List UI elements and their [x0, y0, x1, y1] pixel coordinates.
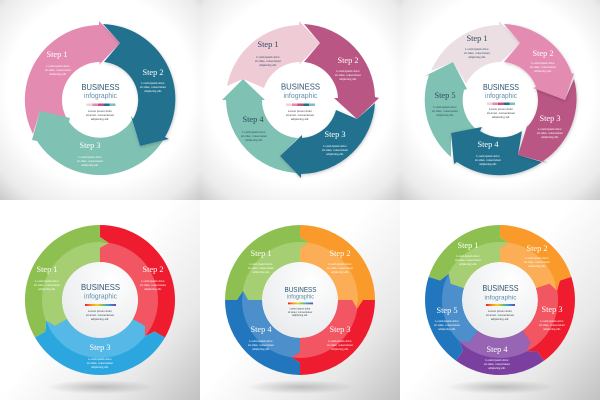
text: Step 1 body: adipiscing elit.	[252, 270, 270, 274]
center text: adipiscing elit.	[91, 317, 109, 321]
text: Step 3 body: sit amet, consectetuer	[322, 148, 348, 153]
heading: Step 2: Step 2	[143, 68, 163, 77]
heading: Step 4: Step 4	[243, 115, 264, 124]
color bar	[486, 304, 515, 306]
text: Step 1 body: sit amet, consectetuer	[255, 59, 281, 64]
text: Step 3 body: Lorem ipsum dolor	[323, 144, 347, 148]
segment: Step 1	[431, 21, 520, 84]
text: Step 2 body: Lorem ipsum dolor	[328, 262, 352, 266]
text: Step 1 body: sit amet, consectetuer	[45, 68, 71, 73]
ground shadow	[245, 380, 355, 394]
text: Step 4 body: Lorem ipsum dolor	[476, 154, 500, 158]
background	[200, 200, 400, 400]
heading: Step 5: Step 5	[435, 91, 455, 100]
heading: Step 3: Step 3	[90, 343, 110, 352]
segment: Step 2	[300, 225, 375, 309]
segment: Step 3	[518, 79, 577, 163]
text: Step 4 body: Lorem ipsum dolor	[242, 130, 266, 134]
segment: Step 1	[227, 21, 320, 88]
background	[200, 0, 400, 200]
text: Step 2 body: Lorem ipsum dolor	[141, 81, 165, 85]
segment: Step 4	[225, 291, 300, 375]
text: Step 5 body: sit amet, consectetuer	[432, 109, 458, 114]
segment: Step 1	[225, 225, 309, 300]
text: Step 1 body: Lorem ipsum dolor	[35, 279, 59, 283]
center subtitle: infographic	[287, 294, 314, 300]
heading: Step 2: Step 2	[338, 56, 358, 65]
text: Step 3 body: Lorem ipsum dolor	[88, 357, 112, 361]
center circle	[462, 262, 538, 338]
heading: Step 3: Step 3	[80, 141, 100, 150]
text: Step 2 body: adipiscing elit.	[331, 270, 349, 274]
center text: sit amet, consectetuer	[487, 111, 515, 115]
center title: BUSINESS	[82, 83, 120, 92]
text: Step 3 body: Lorem ipsum dolor	[328, 339, 352, 343]
center subtitle: infographic	[284, 91, 318, 100]
panel: five-step vivid cycle	[400, 200, 600, 400]
text: Step 2 body: Lorem ipsum dolor	[525, 256, 549, 260]
text: Step 2 body: adipiscing elit.	[339, 77, 357, 81]
center subtitle: infographic	[485, 91, 517, 100]
panel: four-step pastel cycle	[200, 0, 400, 200]
segment: Step 1	[429, 225, 509, 288]
center circle	[62, 62, 138, 138]
color bar	[86, 104, 116, 106]
segment: Step 3	[500, 268, 600, 366]
heading: Step 1: Step 1	[258, 40, 278, 49]
center circle	[262, 262, 338, 338]
text: Step 4 body: sit amet, consectetuer	[484, 362, 510, 367]
segment: Step 2	[504, 24, 574, 100]
text: Step 2 body: adipiscing elit.	[144, 89, 162, 93]
color bar	[85, 304, 116, 306]
segment: Step 3	[32, 111, 163, 175]
text: Step 4 body: adipiscing elit.	[479, 162, 497, 166]
heading: Step 3: Step 3	[540, 114, 560, 123]
center text: Lorem ipsum dolor	[489, 107, 513, 111]
background	[0, 200, 200, 400]
heading: Step 1: Step 1	[458, 241, 478, 250]
segment: Step 2	[103, 24, 175, 146]
text: Step 2 body: sit amet, consectetuer	[140, 283, 166, 288]
color bar	[288, 302, 313, 304]
center title: BUSINESS	[482, 284, 519, 293]
center subtitle: infographic	[484, 294, 517, 302]
text: Step 1 body: adipiscing elit.	[259, 63, 277, 67]
center subtitle: infographic	[84, 292, 117, 300]
background	[0, 0, 200, 200]
text: Step 2 body: adipiscing elit.	[528, 264, 546, 268]
text: Step 1 body: Lorem ipsum dolor	[249, 262, 273, 266]
center text: Lorem ipsum dolor	[88, 109, 112, 113]
heading: Step 2: Step 2	[143, 265, 163, 274]
text: Step 1 body: adipiscing elit.	[468, 55, 486, 59]
heading: Step 2: Step 2	[533, 49, 553, 58]
text: Step 4 body: adipiscing elit.	[488, 366, 506, 370]
text: Step 2 body: sit amet, consectetuer	[327, 266, 353, 271]
text: Step 1 body: sit amet, consectetuer	[455, 258, 481, 263]
heading: Step 4: Step 4	[478, 140, 499, 149]
center text: sit amet, consectetuer	[486, 313, 514, 317]
text: Step 5 body: sit amet, consectetuer	[434, 323, 460, 328]
background	[400, 200, 600, 400]
heading: Step 5: Step 5	[437, 306, 457, 315]
center subtitle: infographic	[84, 91, 117, 100]
heading: Step 2: Step 2	[330, 249, 350, 258]
text: Step 2 body: adipiscing elit.	[534, 69, 552, 73]
center text: Lorem ipsum dolor	[488, 309, 512, 313]
heading: Step 4: Step 4	[251, 325, 272, 334]
segment: Step 1	[25, 225, 109, 338]
background	[400, 0, 600, 200]
center text: adipiscing elit.	[491, 317, 509, 321]
center text: adipiscing elit.	[91, 117, 109, 121]
text: Step 1 body: sit amet, consectetuer	[464, 51, 490, 56]
segment: Step 2	[304, 24, 379, 119]
heading: Step 4: Step 4	[487, 345, 508, 354]
segment: Step 5	[425, 62, 476, 157]
center text: adipiscing elit.	[292, 314, 308, 317]
center text: sit amet, consectetuer	[86, 113, 114, 117]
text: Step 1 body: adipiscing elit.	[459, 262, 477, 266]
panel: three-step vivid cycle	[0, 200, 202, 400]
heading: Step 1: Step 1	[467, 34, 487, 43]
text: Step 3 body: adipiscing elit.	[331, 347, 349, 351]
text: Step 5 body: Lorem ipsum dolor	[433, 105, 457, 109]
text: Step 5 body: adipiscing elit.	[438, 327, 456, 331]
text: Step 2 body: sit amet, consectetuer	[530, 65, 556, 70]
ground shadow	[45, 380, 155, 394]
text: Step 2 body: adipiscing elit.	[144, 287, 162, 291]
heading: Step 1: Step 1	[47, 50, 67, 59]
text: Step 4 body: sit amet, consectetuer	[475, 158, 501, 163]
text: Step 5 body: Lorem ipsum dolor	[435, 319, 459, 323]
segment: Step 2	[489, 209, 574, 305]
heading: Step 3: Step 3	[325, 130, 345, 139]
panel: four-step vivid cycle	[200, 200, 400, 400]
center text: Lorem ipsum dolor	[88, 309, 112, 313]
center text: adipiscing elit.	[291, 117, 309, 121]
segment: Step 2	[63, 216, 202, 345]
ground shadow	[445, 380, 555, 394]
center title: BUSINESS	[281, 82, 321, 92]
text: Step 1 body: sit amet, consectetuer	[34, 283, 60, 288]
text: Step 1 body: adipiscing elit.	[49, 72, 67, 76]
center circle	[262, 62, 338, 138]
text: Step 3 body: sit amet, consectetuer	[539, 323, 565, 328]
text: Step 2 body: sit amet, consectetuer	[524, 260, 550, 265]
text: Step 3 body: sit amet, consectetuer	[327, 343, 353, 348]
text: Step 2 body: Lorem ipsum dolor	[141, 279, 165, 283]
center text: sit amet, consectetuer	[286, 113, 314, 117]
text: Step 3 body: sit amet, consectetuer	[87, 361, 113, 366]
text: Step 2 body: sit amet, consectetuer	[140, 85, 166, 90]
heading: Step 2: Step 2	[527, 244, 547, 253]
heading: Step 3: Step 3	[542, 305, 562, 314]
center text: Lorem ipsum dolor	[288, 109, 312, 113]
segment: Step 4	[451, 127, 542, 175]
segment: Step 4	[449, 304, 551, 400]
segment: Step 4	[222, 79, 298, 173]
text: Step 2 body: sit amet, consectetuer	[335, 73, 361, 78]
text: Step 3 body: adipiscing elit.	[541, 135, 559, 139]
panel: three-step pastel cycle	[0, 0, 200, 200]
segment: Step 3	[31, 273, 170, 400]
text: Step 3 body: sit amet, consectetuer	[537, 131, 563, 136]
text: Step 3 body: Lorem ipsum dolor	[78, 155, 102, 159]
segment: Step 3	[291, 300, 375, 375]
text: Step 1 body: Lorem ipsum dolor	[465, 47, 489, 51]
text: Step 1 body: sit amet, consectetuer	[248, 266, 274, 271]
text: Step 1 body: Lorem ipsum dolor	[46, 64, 70, 68]
center circle	[62, 262, 138, 338]
center circle	[462, 62, 538, 138]
text: Step 3 body: adipiscing elit.	[543, 327, 561, 331]
text: Step 2 body: Lorem ipsum dolor	[336, 69, 360, 73]
text: Step 3 body: Lorem ipsum dolor	[540, 319, 564, 323]
text: Step 2 body: Lorem ipsum dolor	[531, 61, 555, 65]
center title: BUSINESS	[483, 83, 519, 92]
segment: Step 1	[25, 21, 120, 134]
center text: sit amet, consectetuer	[86, 313, 114, 317]
text: Step 4 body: sit amet, consectetuer	[248, 343, 274, 348]
text: Step 3 body: Lorem ipsum dolor	[538, 127, 562, 131]
text: Step 4 body: sit amet, consectetuer	[241, 134, 267, 139]
center text: Lorem ipsum dolor	[290, 308, 311, 310]
heading: Step 1: Step 1	[251, 249, 271, 258]
center text: sit amet, consectetuer	[288, 311, 312, 314]
text: Step 3 body: sit amet, consectetuer	[77, 159, 103, 164]
text: Step 4 body: Lorem ipsum dolor	[249, 339, 273, 343]
text: Step 3 body: adipiscing elit.	[326, 152, 344, 156]
segment: Step 5	[407, 268, 492, 364]
text: Step 1 body: Lorem ipsum dolor	[456, 254, 480, 258]
color bar	[286, 104, 315, 106]
center title: BUSINESS	[81, 283, 121, 292]
heading: Step 1: Step 1	[37, 265, 57, 274]
panel: five-step pastel cycle	[400, 0, 600, 200]
text: Step 4 body: adipiscing elit.	[245, 138, 263, 142]
text: Step 1 body: Lorem ipsum dolor	[256, 55, 280, 59]
text: Step 5 body: adipiscing elit.	[436, 113, 454, 117]
heading: Step 3: Step 3	[330, 325, 350, 334]
color bar	[487, 102, 515, 105]
text: Step 4 body: adipiscing elit.	[252, 347, 270, 351]
text: Step 3 body: adipiscing elit.	[91, 365, 109, 369]
segment: Step 3	[280, 103, 375, 178]
center text: adipiscing elit.	[492, 115, 510, 119]
text: Step 3 body: adipiscing elit.	[81, 163, 99, 167]
text: Step 1 body: adipiscing elit.	[38, 287, 56, 291]
text: Step 4 body: Lorem ipsum dolor	[485, 358, 509, 362]
center title: BUSINESS	[284, 287, 317, 294]
